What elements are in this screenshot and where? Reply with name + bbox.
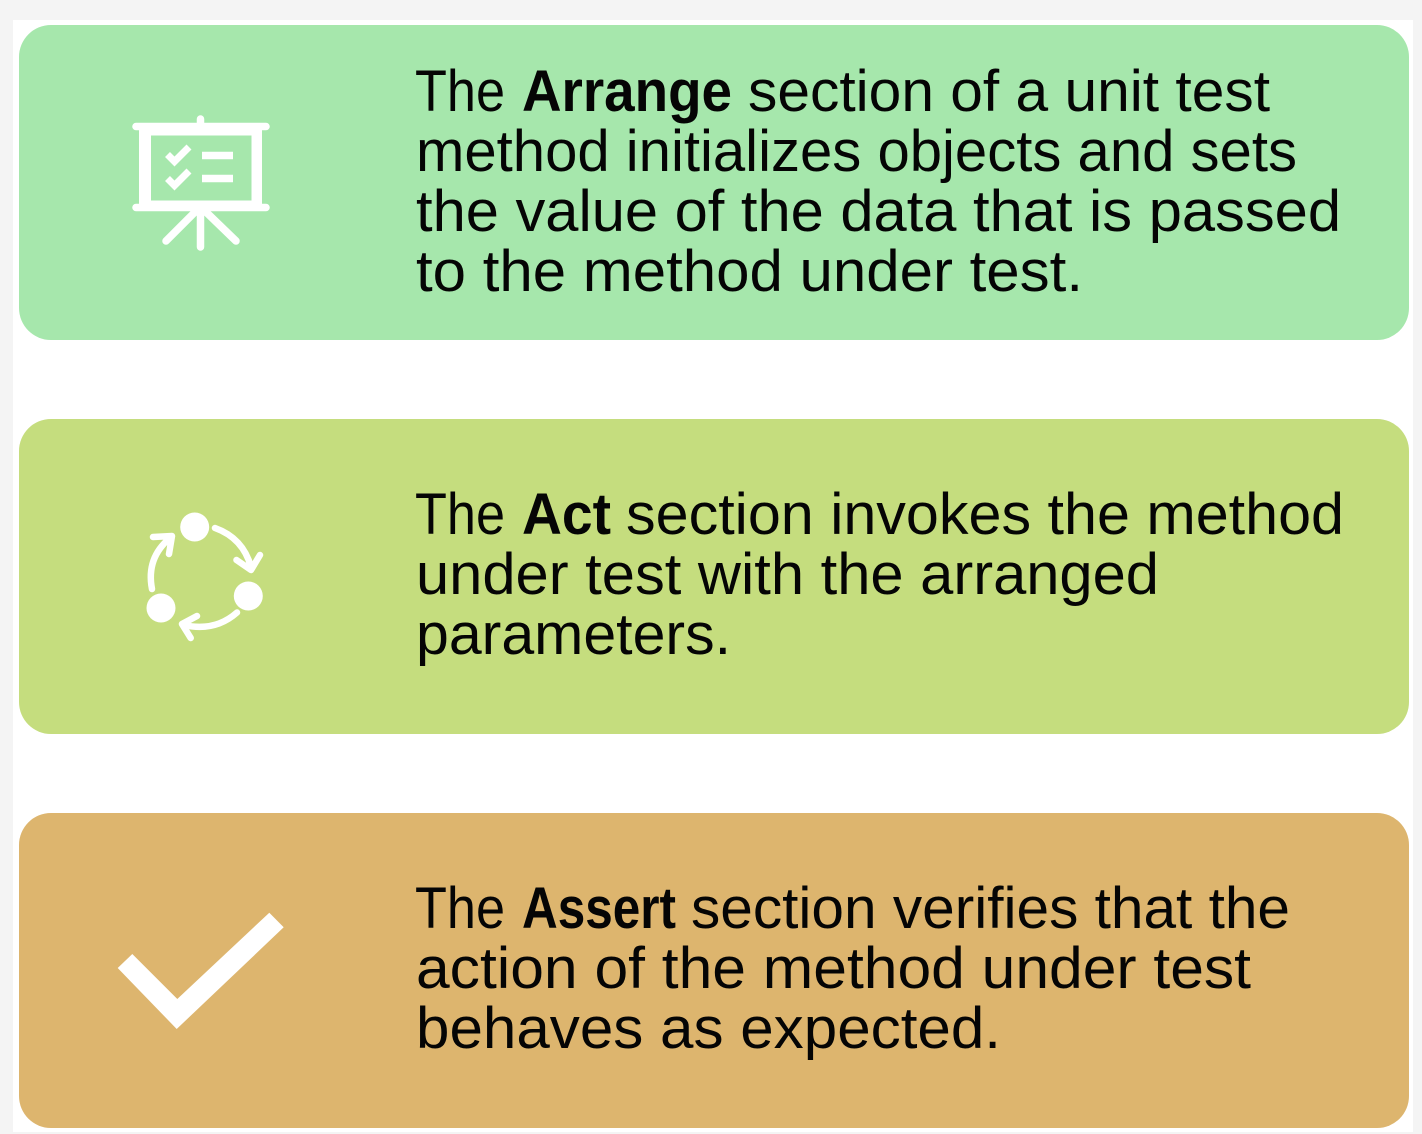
text: assert description xyxy=(415,876,1290,1061)
text: assert description: The xyxy=(415,876,505,941)
panel: arrange xyxy=(19,25,1409,340)
text: act description xyxy=(415,482,1344,667)
text: act description: under test with the arranged xyxy=(416,542,1159,607)
text: arrange description: Arrange xyxy=(522,59,732,124)
text: act description: Act xyxy=(522,482,611,547)
icon: check mark xyxy=(118,913,284,1029)
text: act description: section invokes the method xyxy=(626,482,1344,547)
text: assert description: behaves as expected. xyxy=(416,996,1001,1061)
text: act description: The xyxy=(415,482,505,547)
panel: act xyxy=(19,419,1409,734)
text: arrange description: the value of the data that is passed xyxy=(416,179,1341,244)
text: arrange description: to the method under test. xyxy=(416,239,1083,304)
text: arrange description: section of a unit test xyxy=(748,59,1270,124)
text: assert description: Assert xyxy=(522,876,676,941)
text: act description: parameters. xyxy=(416,602,731,667)
text: arrange description: The xyxy=(415,59,505,124)
text: assert description: section verifies that the xyxy=(691,876,1290,941)
panel: assert xyxy=(19,813,1409,1128)
text: arrange description: method initializes objects and sets xyxy=(416,119,1297,184)
icon: cycle of three nodes with arrows xyxy=(146,512,263,638)
text: assert description: action of the method under test xyxy=(416,936,1251,1001)
icon: presentation board with checklist xyxy=(136,119,266,247)
text: arrange description xyxy=(415,59,1341,304)
